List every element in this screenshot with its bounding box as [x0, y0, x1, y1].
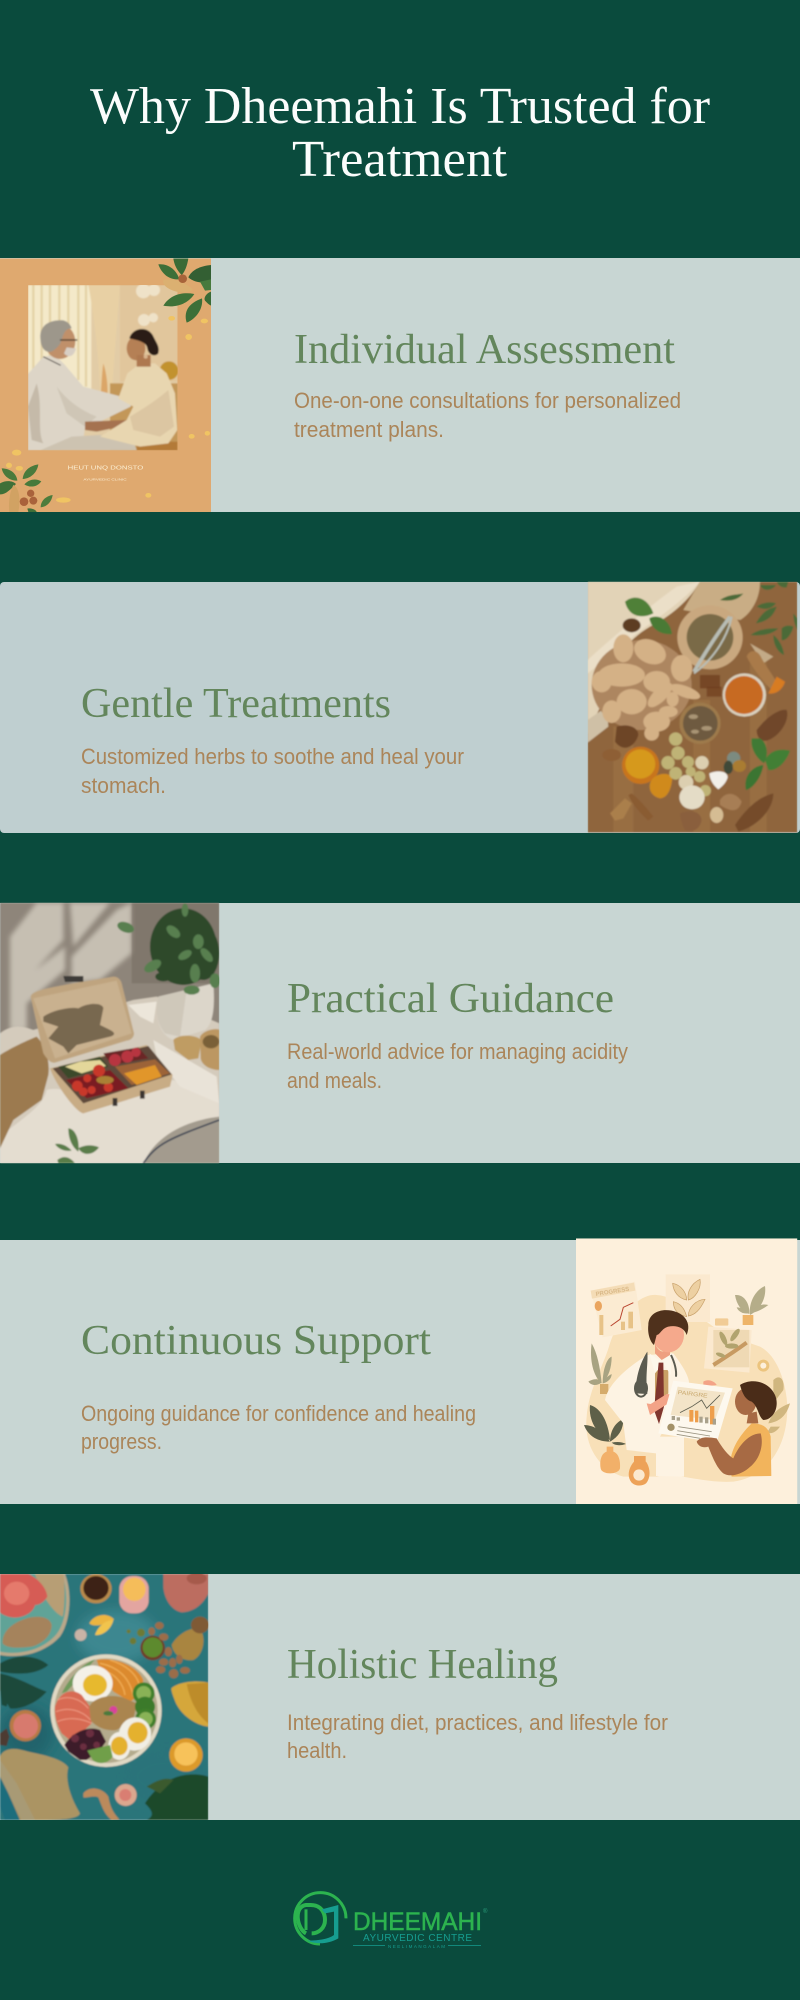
title: [90, 78, 710, 188]
doctor: [605, 1353, 689, 1476]
ginger cluster: [592, 640, 692, 730]
location: NEELIMANGALAM: [388, 1944, 445, 1949]
registered mark: ®: [483, 1908, 488, 1915]
plant foliage: [150, 908, 219, 985]
image: illustrated doctor showing a progress chart to a patient: PROGRESS: [595, 1287, 630, 1298]
compartments: [58, 1057, 108, 1078]
nuts and gold pot: [172, 1628, 203, 1660]
body text: [81, 1401, 476, 1454]
salt bowl: [10, 1710, 41, 1741]
body text: progress.: [81, 1429, 162, 1454]
report: [658, 1381, 733, 1443]
panel: Gentle Treatments: [0, 582, 800, 833]
panel: Continuous Support: [0, 1238, 800, 1504]
left foliage: [0, 1657, 48, 1709]
leaf poster: [666, 1274, 710, 1322]
progress chart: [591, 1282, 642, 1337]
lid: [63, 976, 83, 982]
eggs lower: [114, 1713, 156, 1755]
patient: [730, 1423, 771, 1477]
body text: treatment plans.: [294, 417, 444, 442]
logo: Dheemahi Ayurvedic Centre: [295, 1893, 488, 1949]
grain bowl: [679, 703, 721, 744]
image: ayurvedic herbs and spices on a wooden table: [588, 582, 797, 833]
berries: [64, 1729, 106, 1760]
bottom left botanicals: [0, 464, 53, 512]
cloth: [0, 1749, 80, 1820]
body text: Ongoing guidance for confidence and healing: [81, 1401, 476, 1426]
icon: DM monogram ring: [295, 1893, 346, 1944]
bottom items: [83, 1789, 119, 1820]
candle right: [169, 1738, 203, 1772]
heading: Individual Assessment: [294, 327, 675, 373]
panel: Holistic Healing: [0, 1572, 800, 1820]
image: illustrated doctor showing a progress chart to a patient: PAIRGRE: [677, 1390, 708, 1400]
carrots: [97, 1659, 143, 1702]
body text: and meals.: [287, 1068, 382, 1093]
left plants: [588, 1343, 612, 1385]
sprig: [68, 1128, 79, 1152]
basil top: [625, 598, 653, 616]
body text: [294, 388, 681, 442]
body text: [287, 1039, 628, 1093]
botanical card: [704, 1327, 752, 1373]
green slices: [133, 1682, 155, 1704]
woman: [100, 363, 177, 447]
pale capsules: [661, 732, 711, 796]
title: Treatment: [292, 131, 508, 188]
heading: Practical Guidance: [287, 976, 614, 1022]
body text: Customized herbs to soothe and heal your: [81, 744, 464, 769]
greens: [62, 1659, 95, 1693]
body text: Integrating diet, practices, and lifestyle for: [287, 1710, 668, 1735]
yellow fruit: [171, 1681, 208, 1727]
man body: [28, 355, 132, 450]
panel: Individual Assessment: [0, 258, 800, 512]
knit throw: [0, 1037, 49, 1148]
mince: [89, 1696, 137, 1730]
plant pot: [166, 984, 215, 1040]
egg top: [73, 1665, 113, 1701]
blanket light areas: [0, 1080, 219, 1163]
top objects: [80, 1574, 112, 1603]
right bg plant: [767, 1377, 790, 1433]
petals: [6, 316, 210, 503]
image: doctor consulting a patient on an orange card: AYURVEDIC CLINIC: [83, 477, 128, 481]
right sprigs: [720, 582, 797, 655]
image: healthy food bowl on a teal table: [0, 1572, 210, 1820]
tagline: AYURVEDIC CENTRE: [363, 1933, 472, 1944]
tomato: [55, 1691, 92, 1742]
body text: [287, 1710, 668, 1763]
top right botanicals: [158, 258, 211, 323]
top left dish: [0, 1574, 70, 1656]
wordmark: DHEEMAHI: [353, 1908, 482, 1936]
image: illustrated doctor showing a progress chart to a patient: [576, 1238, 797, 1504]
basil lower: [751, 738, 767, 763]
tray: [50, 1045, 173, 1113]
title: Why Dheemahi Is Trusted for: [90, 78, 710, 135]
heading: Gentle Treatments: [81, 681, 391, 727]
herb plant on wall: [735, 1286, 768, 1315]
jar: [634, 1456, 646, 1462]
image: doctor consulting a patient on an orange card: HEUT UNQ DONSTO: [68, 465, 144, 471]
body text: [81, 744, 464, 798]
body text: health.: [287, 1738, 347, 1763]
orange bowl: [723, 673, 766, 717]
panel: Practical Guidance: [0, 903, 800, 1163]
body text: Real-world advice for managing acidity: [287, 1039, 628, 1064]
heading: Holistic Healing: [287, 1642, 558, 1688]
turmeric bowl: [622, 747, 659, 784]
image: doctor consulting a patient on an orange card: [0, 258, 211, 512]
heading: Continuous Support: [81, 1318, 431, 1364]
body text: stomach.: [81, 773, 166, 798]
brown root: [757, 710, 787, 741]
body text: One-on-one consultations for personalized: [294, 388, 681, 413]
plate: [50, 1654, 162, 1767]
image: bento lunchbox on linen by a potted plant: [0, 903, 220, 1163]
cucumber: [87, 1745, 113, 1763]
